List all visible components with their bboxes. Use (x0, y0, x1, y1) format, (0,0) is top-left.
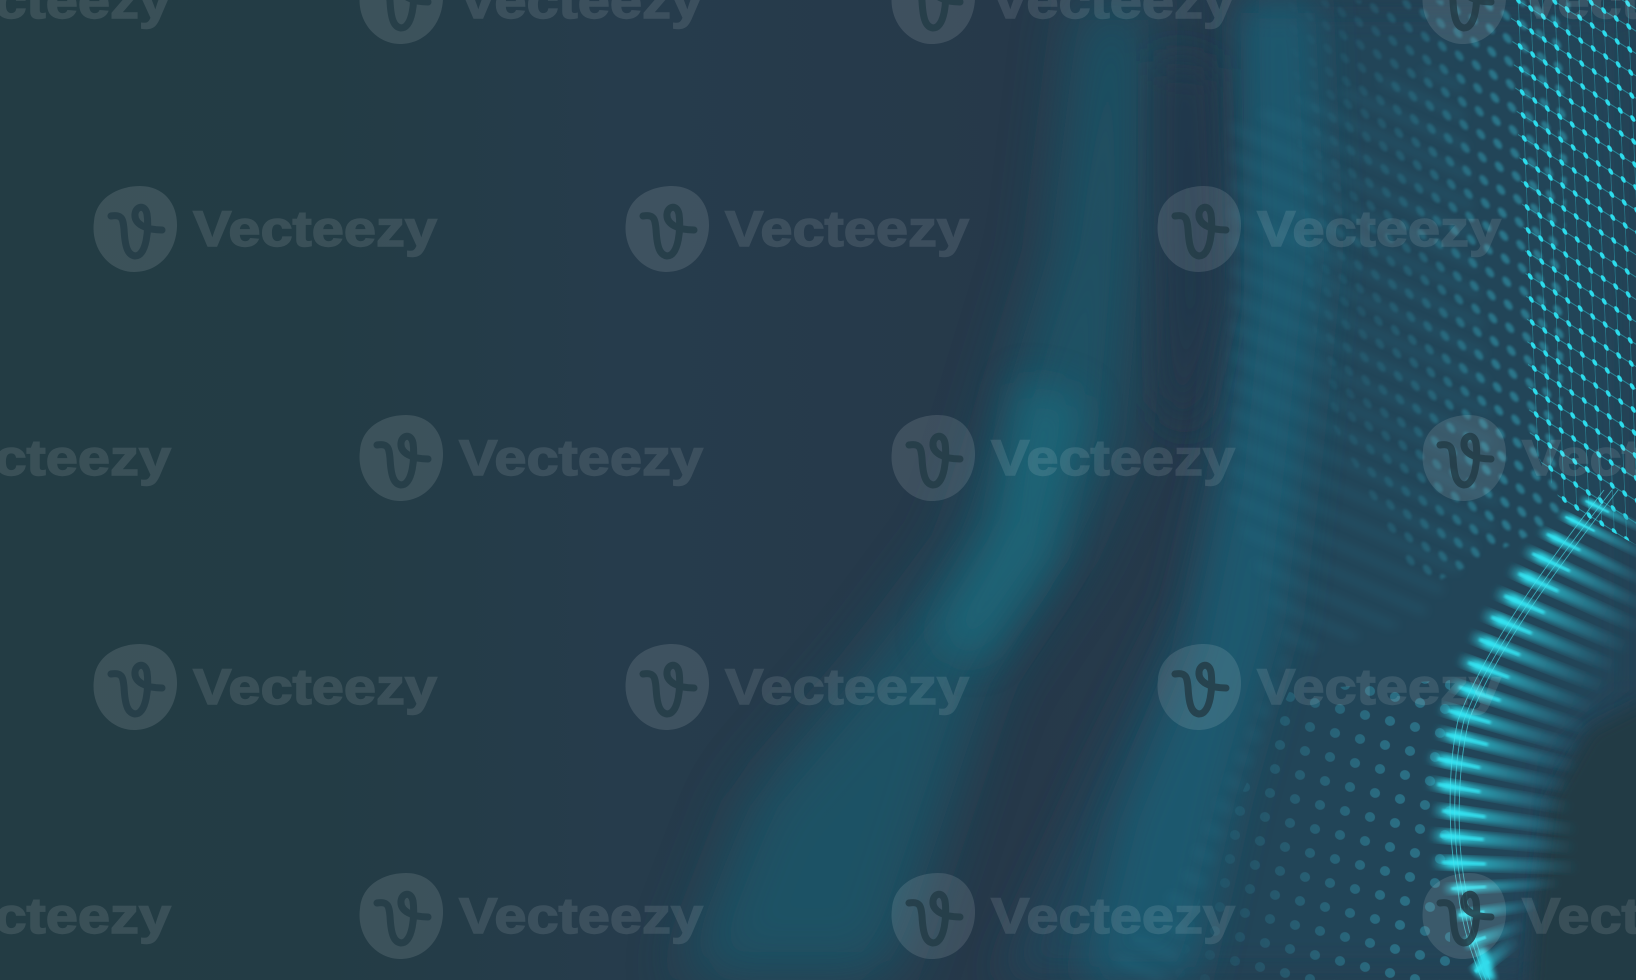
defocused dot grid: lower (1214, 680, 1450, 980)
watermark 14 (1158, 644, 1501, 730)
ridge lines (1450, 490, 1618, 980)
bright ridge streaks (1424, 494, 1636, 980)
watermark 18 (1423, 873, 1636, 959)
dark right corner (1530, 690, 1636, 980)
blurred dot rows (1100, 60, 1500, 980)
watermark row 2 (94, 186, 1501, 272)
blurred wave band: middle (1080, 0, 1325, 980)
watermark row 5 (0, 873, 1636, 959)
watermark 13 (626, 644, 969, 730)
watermark 6 (626, 186, 969, 272)
watermark 7: Vecteezy (1257, 201, 1501, 257)
watermark 11 (1423, 415, 1636, 501)
watermark 10: Vecteezy (991, 430, 1235, 486)
watermark 10 (892, 415, 1235, 501)
dark gap between bands (1160, 60, 1220, 430)
blurred wave band: left (680, 0, 1150, 980)
ridge bottom glow (1476, 948, 1496, 980)
watermark 17: Vecteezy (991, 888, 1235, 944)
watermark 12: Vecteezy (193, 659, 437, 715)
watermark row 3 (0, 415, 1636, 501)
watermark 6: Vecteezy (725, 201, 969, 257)
watermark 13: Vecteezy (725, 659, 969, 715)
watermark 17 (892, 873, 1235, 959)
watermark 16 (360, 873, 703, 959)
blurred wave glow: left band highlight (930, 380, 1085, 660)
sharp mesh dots (1510, 0, 1636, 545)
watermark 16: Vecteezy (459, 888, 703, 944)
watermark 12 (94, 644, 437, 730)
watermark 7 (1158, 186, 1501, 272)
watermark 4 (1423, 0, 1636, 44)
watermark 2 (360, 0, 703, 44)
watermark 3 (892, 0, 1235, 44)
watermark 5: Vecteezy (193, 201, 437, 257)
watermark 9 (360, 415, 703, 501)
watermark row 1 (0, 0, 1636, 44)
defocused dot grid: upper (1324, 0, 1571, 580)
wave body: dark mesh surface (1000, 0, 1636, 980)
watermark row 4 (94, 644, 1501, 730)
watermark 14: Vecteezy (1257, 659, 1501, 715)
watermark 9: Vecteezy (459, 430, 703, 486)
watermark 5 (94, 186, 437, 272)
